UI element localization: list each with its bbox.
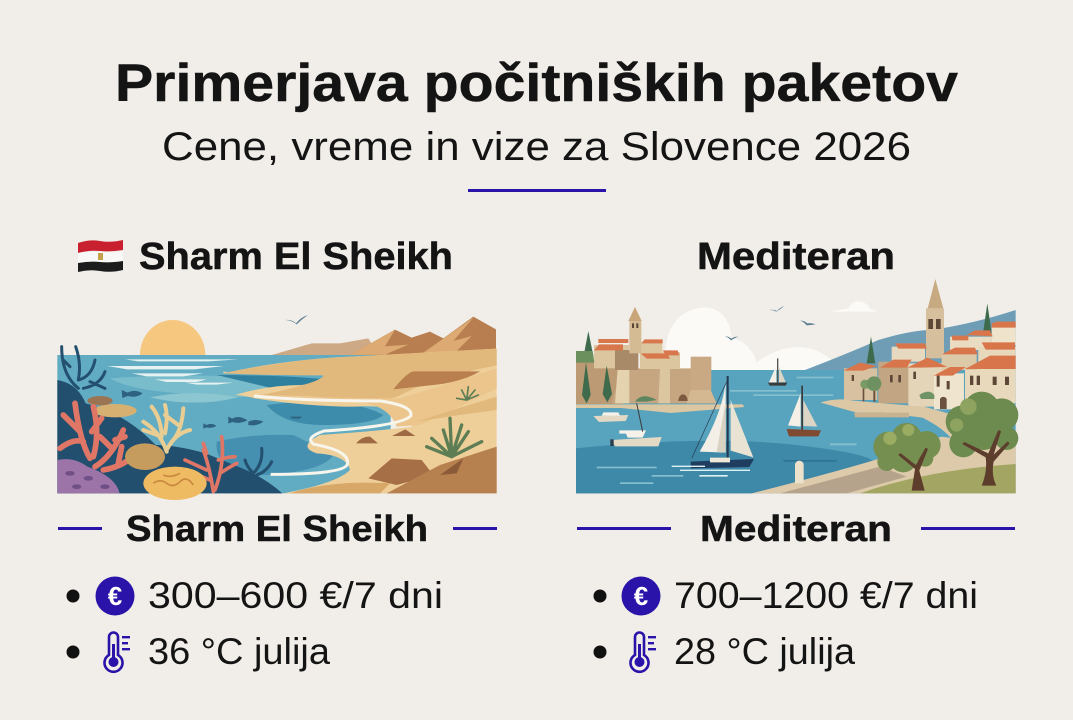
bollard xyxy=(795,461,804,483)
icon: Egyptian flag xyxy=(78,240,123,272)
temperature: Sharm El Sheikh: 36 °C julija xyxy=(148,631,330,672)
dark reef rock xyxy=(57,380,282,493)
birds xyxy=(725,306,816,340)
harbour quay left xyxy=(576,404,744,413)
fish xyxy=(122,390,302,429)
water xyxy=(57,355,391,493)
cloud xyxy=(830,301,877,312)
price: Mediteran: € xyxy=(634,581,648,611)
illustration: Sharm El Sheikh coast xyxy=(57,315,497,500)
subheading: Mediteran: Mediteran xyxy=(700,508,892,549)
temperature: Mediteran: 28 °C julija xyxy=(674,631,855,672)
purple coral xyxy=(57,459,120,493)
bird xyxy=(285,315,308,324)
hill xyxy=(805,310,1016,370)
fortress xyxy=(576,362,623,404)
motorboats xyxy=(593,403,662,446)
surf xyxy=(254,396,411,474)
bell tower spire xyxy=(928,279,943,308)
temperature: Mediteran xyxy=(594,631,855,672)
subheading: Sharm El Sheikh xyxy=(58,508,497,549)
price: Sharm El Sheikh: € xyxy=(108,581,122,611)
red coral xyxy=(60,403,137,470)
heading: Mediteran: Mediteran xyxy=(697,236,895,278)
promenade xyxy=(752,437,1016,493)
mountains xyxy=(272,338,378,355)
sun xyxy=(140,320,205,355)
coral fan xyxy=(143,405,190,452)
sailboat large xyxy=(672,376,754,477)
shell xyxy=(93,404,137,417)
subtitle: Cene, vreme in vize za Slovence 2026 xyxy=(162,125,911,169)
price: Sharm El Sheikh: 300–600 €/7 dni xyxy=(148,575,443,616)
sailboat far xyxy=(768,358,787,386)
title: Primerjava počitniških paketov xyxy=(115,54,959,113)
heading: Sharm El Sheikh: Sharm El Sheikh xyxy=(139,236,453,278)
sun haze xyxy=(665,307,842,370)
town buildings xyxy=(844,368,877,400)
subheading: Mediteran xyxy=(577,508,1015,549)
olive tree right xyxy=(946,392,1018,486)
agave plants xyxy=(427,418,482,457)
sand xyxy=(223,349,497,493)
price: Mediteran: 700–1200 €/7 dni xyxy=(674,575,978,616)
cypress trees xyxy=(582,303,992,403)
town trees xyxy=(860,376,934,403)
sun glints xyxy=(107,359,238,385)
subheading: Sharm El Sheikh: Sharm El Sheikh xyxy=(126,508,428,549)
brain coral xyxy=(125,443,165,470)
olive tree left xyxy=(873,423,941,491)
temperature: Sharm El Sheikh xyxy=(66,631,330,672)
quay right xyxy=(821,399,964,442)
illustration: Mediterranean harbour xyxy=(576,279,1018,493)
water xyxy=(576,370,1016,493)
title divider xyxy=(468,189,606,192)
rocks xyxy=(356,437,378,443)
dark blue coral xyxy=(62,347,272,475)
sailboat medium xyxy=(787,386,821,436)
